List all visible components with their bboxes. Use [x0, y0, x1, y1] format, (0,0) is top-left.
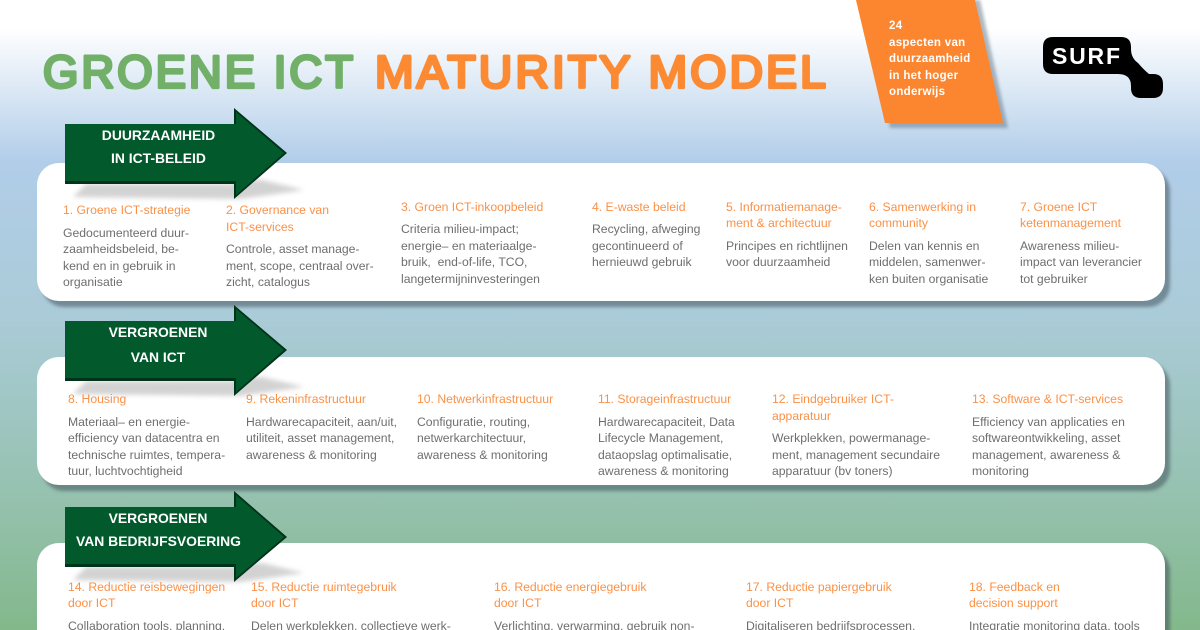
item 11: Hardwarecapaciteit, Data Lifecycle Management, dataopslag optimalisatie, awareness & monitoring — [598, 414, 735, 478]
item 6: Delen van kennis en middelen, samenwer- ken buiten organisatie — [869, 238, 988, 286]
item 4 — [592, 200, 700, 269]
arrow: duurzaamheid in ict-beleid: DUURZAAMHEID — [102, 127, 215, 143]
panel: vergroenen van ict — [37, 357, 1165, 485]
arrow: vergroenen van bedrijfsvoering: VAN BEDRIJFSVOERING — [76, 533, 241, 549]
item 18: 18. Feedback en decision support — [969, 580, 1060, 610]
item 13: Efficiency van applicaties en softwareontwikkeling, asset management, awareness & monitoring — [972, 414, 1125, 478]
item 6: 6. Samenwerking in community — [869, 200, 976, 230]
item 14 — [68, 582, 224, 630]
callout: 24 aspecten — [856, 0, 1009, 130]
callout: 24 aspecten: 24 aspecten van duurzaamheid in het hoger onderwijs — [889, 20, 971, 98]
item 12 — [772, 392, 940, 478]
item 1: 1. Groene ICT-strategie — [63, 203, 190, 217]
item 9: Hardwarecapaciteit, aan/uit, utiliteit, asset management, awareness & monitoring — [246, 414, 397, 462]
arrow: vergroenen van bedrijfsvoering — [65, 491, 301, 584]
panel: vergroenen van bedrijfsvoering — [37, 543, 1165, 630]
item 16 — [494, 582, 694, 630]
item 12: 12. Eindgebruiker ICT- apparatuur — [772, 392, 894, 422]
icon: SURF logo — [1043, 37, 1163, 98]
item 2 — [226, 203, 374, 289]
item 5: 5. Informatiemanage- ment & architectuur — [726, 200, 842, 230]
item 1: Gedocumenteerd duur- zaamheidsbeleid, be- kend en in gebruik in organisatie — [63, 226, 189, 289]
arrow: vergroenen van ict: VERGROENEN — [109, 324, 207, 340]
item 5 — [726, 200, 848, 269]
panel: duurzaamheid in ict-beleid — [37, 163, 1165, 301]
item 10 — [417, 392, 553, 462]
item 3: 3. Groen ICT-inkoopbeleid — [401, 200, 543, 214]
item 11: 11. Storageinfrastructuur — [598, 392, 731, 406]
item 8: Materiaal– en energie- efficiency van datacentra en technische ruimtes, tempera- tuur, luchtvochtigheid — [68, 414, 225, 478]
item 10: 10. Netwerkinfrastructuur — [417, 392, 553, 406]
item 15 — [252, 582, 450, 630]
item 5: Principes en richtlijnen voor duurzaamheid — [726, 238, 848, 269]
item 7: 7. Groene ICT ketenmanagement — [1020, 200, 1121, 230]
item 10: Configuratie, routing, netwerkarchitectuur, awareness & monitoring — [417, 414, 548, 462]
item 4: Recycling, afweging gecontinueerd of hernieuwd gebruik — [592, 222, 700, 269]
item 8: 8. Housing — [68, 392, 126, 406]
item 12: Werkplekken, powermanage- ment, management secundaire apparatuur (bv toners) — [772, 431, 940, 478]
arrow: duurzaamheid in ict-beleid — [65, 108, 301, 201]
item 16: 16. Reductie energiegebruik door ICT — [494, 580, 646, 610]
item 15: 15. Reductie ruimtegebruik door ICT — [251, 580, 397, 610]
item 2: 2. Governance van ICT-services — [226, 203, 329, 234]
item 17: 17. Reductie papiergebruik door ICT — [746, 580, 892, 610]
item 7 — [1020, 200, 1142, 286]
item 14: 14. Reductie reisbewegingen door ICT — [68, 580, 225, 610]
arrow: vergroenen van bedrijfsvoering: VERGROENEN — [109, 510, 207, 526]
item 17 — [746, 582, 914, 630]
item 4: 4. E-waste beleid — [592, 200, 686, 214]
icon: SURF logo: SURF — [1052, 43, 1120, 69]
item 6 — [869, 200, 988, 286]
arrow: vergroenen van ict: VAN ICT — [131, 349, 186, 365]
arrow: duurzaamheid in ict-beleid: IN ICT-BELEID — [111, 150, 206, 166]
item 13: 13. Software & ICT-services — [972, 392, 1123, 406]
item 18 — [970, 582, 1140, 630]
title: groene ict: GROENE ICT — [43, 46, 356, 98]
item 9 — [246, 392, 397, 462]
item 7: Awareness milieu- impact van leverancier tot gebruiker — [1020, 238, 1142, 286]
item 9: 9. Rekeninfrastructuur — [246, 392, 366, 406]
item 3: Criteria milieu-impact; energie– en materiaalge- bruik, end-of-life, TCO, langetermijninvesteringen — [401, 222, 540, 286]
title — [43, 46, 829, 98]
arrow: vergroenen van ict — [65, 305, 301, 398]
title: maturity model: MATURITY MODEL — [375, 46, 829, 98]
item 2: Controle, asset manage- ment, scope, centraal over- zicht, catalogus — [226, 242, 374, 289]
